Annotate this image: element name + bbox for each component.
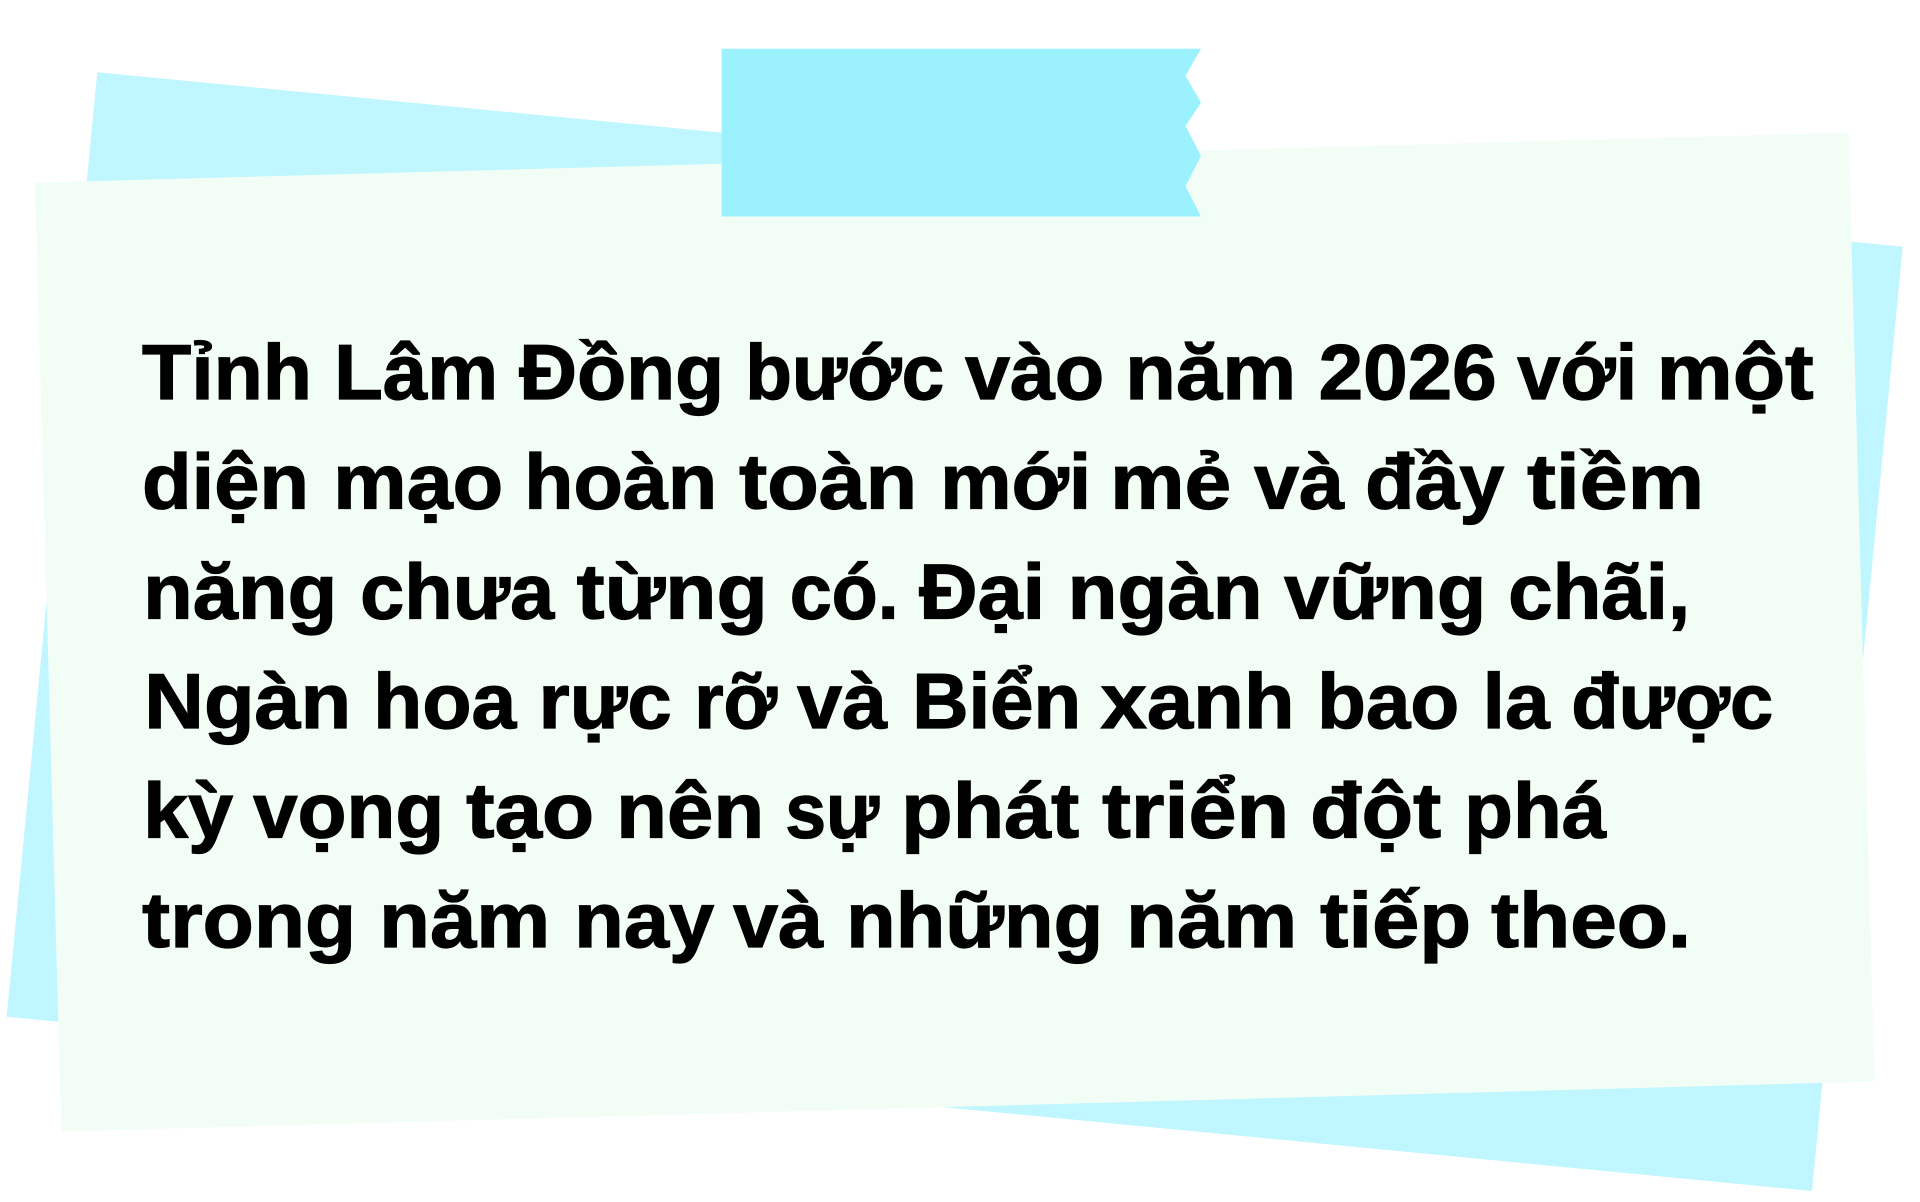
text line 5: kỳ (143, 766, 233, 854)
text line 2: mới (940, 438, 1091, 526)
text line 2: hoàn (524, 438, 717, 526)
text line 6: trong (142, 876, 356, 964)
text line 4: xanh (1101, 657, 1295, 745)
text line 6: theo. (1491, 876, 1691, 964)
text line 2: tiềm (1527, 438, 1704, 526)
text line 5: tạo (466, 766, 594, 854)
text line 5: vọng (253, 766, 444, 854)
text line 2: mạo (333, 438, 503, 526)
text line 4: Ngàn (144, 657, 351, 745)
text line 4: và (797, 657, 888, 745)
text line 5: đột (1310, 766, 1441, 854)
text line 4: la (1483, 657, 1550, 745)
text line 4: hoa (373, 657, 517, 745)
text line 4: rỡ (694, 657, 778, 745)
text line 4: rực (539, 657, 672, 745)
text line 1: Tỉnh (142, 328, 312, 416)
text line 6: những (846, 876, 1103, 964)
text line 3: vững (1284, 547, 1486, 635)
text line 3: chãi, (1508, 547, 1690, 635)
text line 1: bước (745, 328, 944, 416)
text line 3: có. (790, 547, 899, 635)
text line 1: với (1517, 328, 1637, 416)
text line 2: đầy (1365, 438, 1504, 526)
text line 5: triển (1102, 766, 1289, 854)
text line 6: năm (379, 876, 550, 964)
text line 5: phát (901, 766, 1079, 854)
front paper panel (35, 133, 1874, 1131)
text line 2: mẻ (1110, 438, 1231, 526)
text line 5: sự (785, 766, 880, 854)
text line 6: năm (1126, 876, 1297, 964)
text line 2: và (1254, 438, 1345, 526)
text line 3: chưa (360, 547, 555, 635)
text line 6: nay (574, 876, 714, 964)
text line 3: Đại (919, 547, 1045, 635)
text line 4: được (1571, 657, 1773, 745)
text line 4: Biển (912, 657, 1081, 745)
text line 1: năm (1125, 328, 1296, 416)
text line 4: bao (1317, 657, 1459, 745)
text line 2: diện (142, 438, 309, 526)
text line 5: nên (616, 766, 764, 854)
text line 1: một (1657, 328, 1814, 416)
text line 1: 2026 (1319, 328, 1497, 416)
text line 1: Đồng (519, 328, 724, 416)
text line 6: và (733, 876, 824, 964)
text line 5: phá (1464, 766, 1607, 854)
text line 3: từng (577, 547, 768, 635)
text line 3: ngàn (1068, 547, 1263, 635)
text line 1: vào (965, 328, 1104, 416)
washi tape with zigzag edge (722, 49, 1201, 217)
main text block (142, 328, 1814, 964)
text line 2: toàn (739, 438, 917, 526)
text line 6: tiếp (1320, 876, 1471, 964)
text line 1: Lâm (334, 328, 498, 416)
text line 3: năng (143, 547, 337, 635)
